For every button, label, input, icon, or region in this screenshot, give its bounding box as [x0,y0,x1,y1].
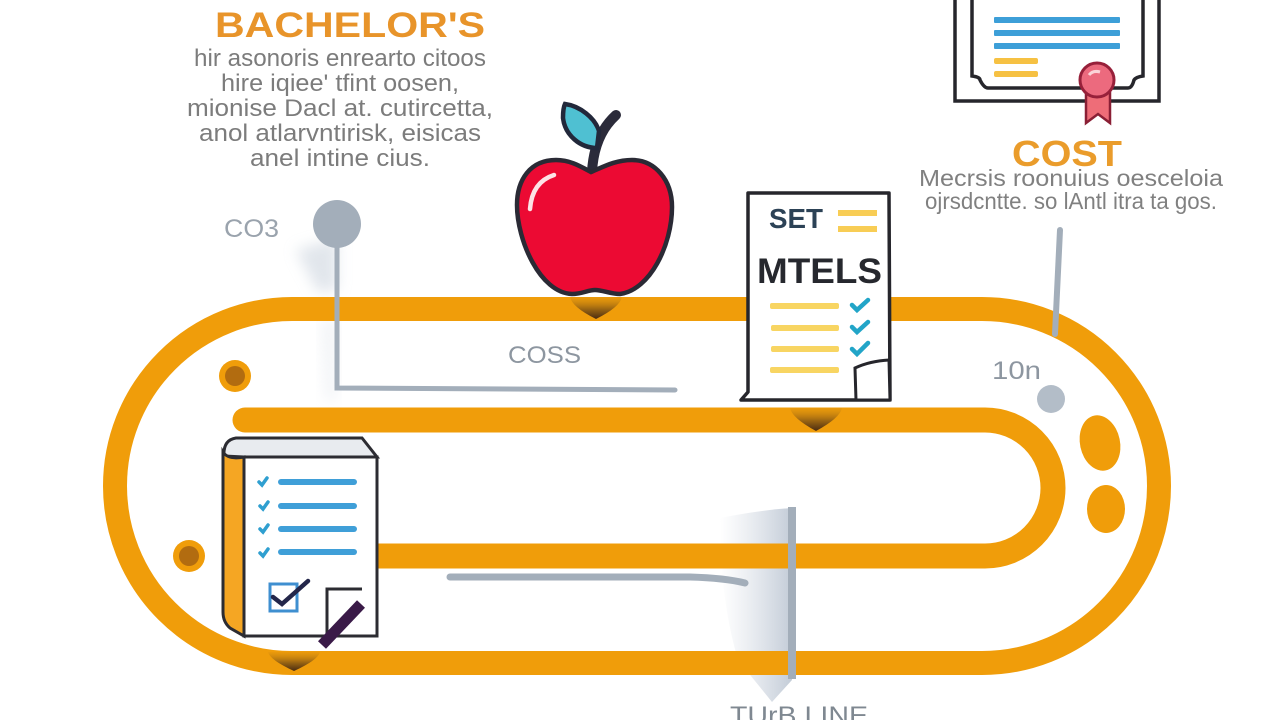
orange blobs right [1075,411,1125,533]
heading: cost: COST [1012,133,1122,174]
document checkmarks [852,300,868,354]
label: MTELS: MTELS [757,252,882,291]
book list lines [278,479,357,555]
grey connector: bottom vertical [788,507,796,679]
text block: cost description [919,165,1223,214]
text block: bachelor's description [187,45,493,172]
grey connector: bottom horizontal [450,577,745,583]
checkbox [270,581,308,611]
text block: bachelor's description: anol atlarvntirisk, eisicas [199,120,481,147]
outer orange track [115,309,1159,663]
text block: bachelor's description: anel intine cius. [250,145,430,172]
label: SET: SET [769,203,823,234]
text block: bachelor's description: hir asonoris enrearto citoos [194,45,486,72]
icon: MTELS document [741,193,890,400]
icon: certificate [955,0,1159,123]
document lines [770,303,839,373]
label: centre cost: COSS [508,342,581,369]
grey connector and marker: left [313,200,675,390]
page corner and pen [322,589,362,645]
document page curl [855,360,890,400]
text block: bachelor's description: mionise Dacl at. cutircetta, [187,95,493,122]
track notches [268,297,842,671]
inner orange track [245,420,1053,556]
book list ticks [259,478,268,556]
text block: bachelor's description: hire iqiee' tfint oosen, [221,70,459,97]
icon: checklist book [223,438,377,645]
heading: bachelor's: BACHELOR'S [215,6,485,45]
label: left cost: CO3 [224,215,279,243]
icon: ribbon seal [1080,63,1114,123]
document short lines [838,210,877,232]
text block: cost description: Mecrsis roonuius oesceloia [919,165,1223,191]
label: 10n: 10n [992,357,1041,385]
icon: apple [517,104,672,294]
orange dots on the track [173,360,251,572]
text block: cost description: ojrsdcntte. so lAntl itra ta gos. [925,188,1217,214]
grey marker: right [1037,385,1065,413]
grey connector: right [1055,230,1060,334]
timeline shadows [296,238,792,702]
